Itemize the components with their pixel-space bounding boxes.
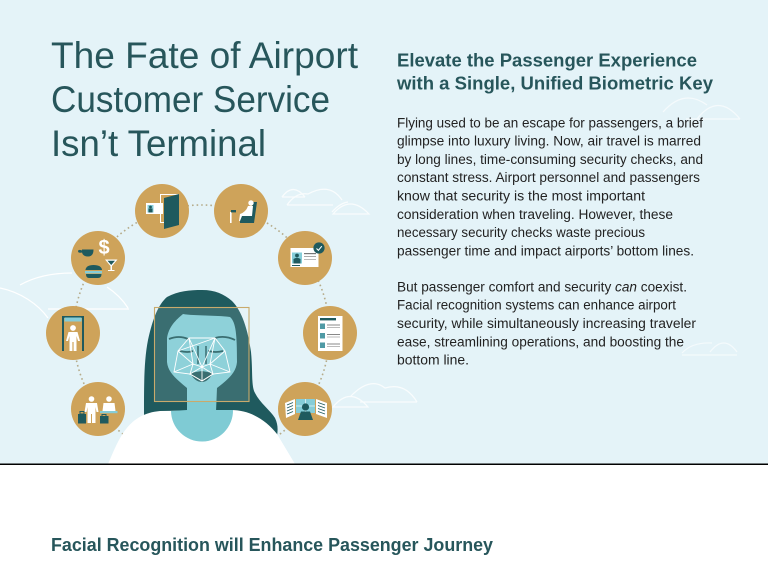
eyes (180, 351, 223, 352)
text block: first paragraph: glimpse into luxury living. Now, air travel is marred (397, 134, 701, 149)
cloud: left large (0, 273, 129, 318)
title (51, 35, 359, 164)
icon: lounge seat (214, 184, 268, 238)
text block: first paragraph: necessary security checks waste precious (397, 225, 645, 240)
text block: first paragraph: consideration when traveling. However, these (397, 207, 673, 222)
heading: elevate the passenger experience: Elevate the Passenger Experience (397, 51, 697, 71)
text block: first paragraph: Flying used to be an escape for passengers, a brief (397, 115, 703, 130)
title: Isn’t Terminal (51, 123, 266, 164)
icon: food and shopping: $ (98, 237, 110, 259)
icon: passengers and baggage (71, 382, 125, 436)
text block: second paragraph: bottom line. (397, 353, 469, 368)
hair (144, 290, 278, 436)
dotted journey ring (74, 205, 330, 461)
cloud: lower middle (333, 384, 417, 407)
panel: white lower section (0, 464, 768, 576)
heading: elevate the passenger experience (396, 51, 713, 94)
text block: first paragraph: know that security is the most important (397, 188, 645, 204)
cloud: upper right (663, 98, 740, 119)
heading: elevate the passenger experience: with a Single, Unified Biometric Key (396, 74, 713, 94)
icon: verified id card (278, 231, 332, 285)
icon: food and shopping (71, 231, 125, 285)
eyebrows (169, 337, 235, 340)
lips (190, 371, 213, 382)
icon: check-in door (135, 184, 189, 238)
text block: second paragraph: ease, streamlining operations, and boosting the (397, 334, 684, 349)
nose (198, 346, 206, 364)
text block: first paragraph: by long lines, time-consuming security checks, and (397, 152, 703, 167)
text block: second paragraph: security, while simultaneously increasing traveler (397, 316, 697, 331)
text block: first paragraph (397, 115, 703, 258)
icon: passenger list (303, 306, 357, 360)
shirt (108, 410, 295, 464)
text block: first paragraph: constant stress. Airport personnel and passengers (397, 170, 700, 185)
recognition frame (154, 308, 249, 402)
text block: first paragraph: passenger time and impact airports’ bottom lines. (397, 243, 694, 258)
face mesh (174, 338, 230, 381)
face (167, 314, 237, 412)
illustration: woman with facial recognition mesh (108, 290, 295, 464)
text block: second paragraph (397, 279, 697, 368)
cloud: upper middle (282, 189, 369, 214)
title: Customer Service (51, 79, 330, 120)
icon: boarding screens (278, 382, 332, 436)
divider line (0, 464, 768, 465)
heading: facial recognition journey: Facial Recognition will Enhance Passenger Journey (51, 535, 493, 555)
neck and face (171, 388, 233, 442)
icon: security scanner (46, 306, 100, 360)
text block: second paragraph: But passenger comfort and security can coexist. (397, 279, 687, 294)
cloud: mid right (682, 343, 737, 355)
text block: second paragraph: Facial recognition systems can enhance airport (397, 298, 676, 313)
title: The Fate of Airport (51, 35, 359, 76)
